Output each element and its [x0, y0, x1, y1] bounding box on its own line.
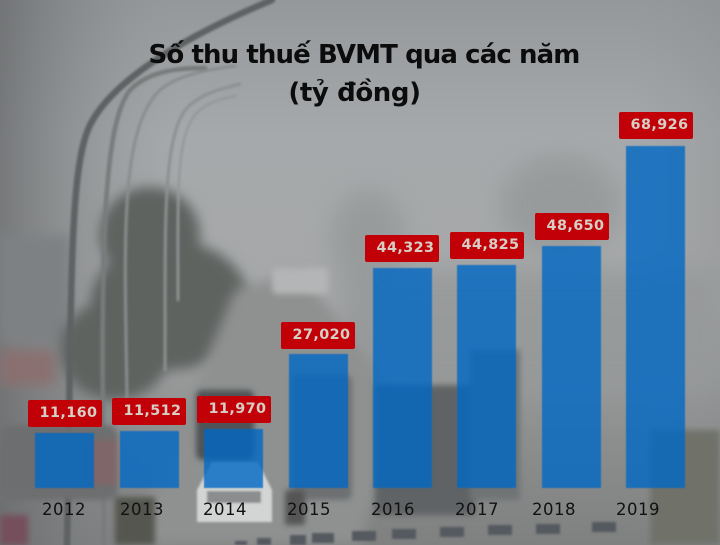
- title: [149, 40, 579, 108]
- traffic: [0, 268, 720, 545]
- year 2015: 2015: [287, 500, 331, 519]
- title: Số thu thuế BVMT qua các năm: [149, 40, 579, 70]
- label 44,323: 44,323: [377, 240, 434, 256]
- bar 2013: [120, 431, 179, 488]
- street lamps: [67, 0, 272, 545]
- year 2012: 2012: [42, 500, 86, 519]
- title: (tỷ đồng): [288, 78, 421, 108]
- bar chart: [28, 112, 693, 519]
- bar 2014: [204, 429, 263, 488]
- label 11,970: 11,970: [209, 401, 266, 417]
- label 44,825: [450, 232, 524, 259]
- label 44,323: [365, 235, 439, 262]
- tree: [60, 187, 250, 400]
- label 11,512: [112, 398, 186, 425]
- label 68,926: [619, 112, 693, 139]
- bar 2016: [373, 268, 432, 488]
- year 2013: 2013: [120, 500, 164, 519]
- bar 2019: [626, 146, 685, 488]
- label 11,512: 11,512: [124, 403, 181, 419]
- bar 2018: [542, 246, 601, 488]
- label 68,926: 68,926: [631, 117, 688, 133]
- label 27,020: [281, 322, 355, 349]
- label 11,970: [197, 396, 271, 423]
- label 27,020: 27,020: [293, 327, 350, 343]
- road markings: [235, 522, 616, 545]
- label 48,650: 48,650: [547, 218, 604, 234]
- label 11,160: [28, 400, 102, 427]
- bar 2017: [457, 265, 516, 488]
- year 2016: 2016: [371, 500, 415, 519]
- year 2017: 2017: [455, 500, 499, 519]
- white car: [197, 462, 272, 522]
- label 48,650: [535, 213, 609, 240]
- distant trees right: [330, 155, 720, 390]
- bar 2015: [289, 354, 348, 488]
- label 11,160: 11,160: [40, 405, 97, 421]
- year 2014: 2014: [203, 500, 247, 519]
- left buildings haze: [0, 235, 70, 385]
- road: [130, 270, 400, 545]
- year 2019: 2019: [616, 500, 660, 519]
- label 44,825: 44,825: [462, 237, 519, 253]
- bar 2012: [35, 433, 94, 488]
- year 2018: 2018: [532, 500, 576, 519]
